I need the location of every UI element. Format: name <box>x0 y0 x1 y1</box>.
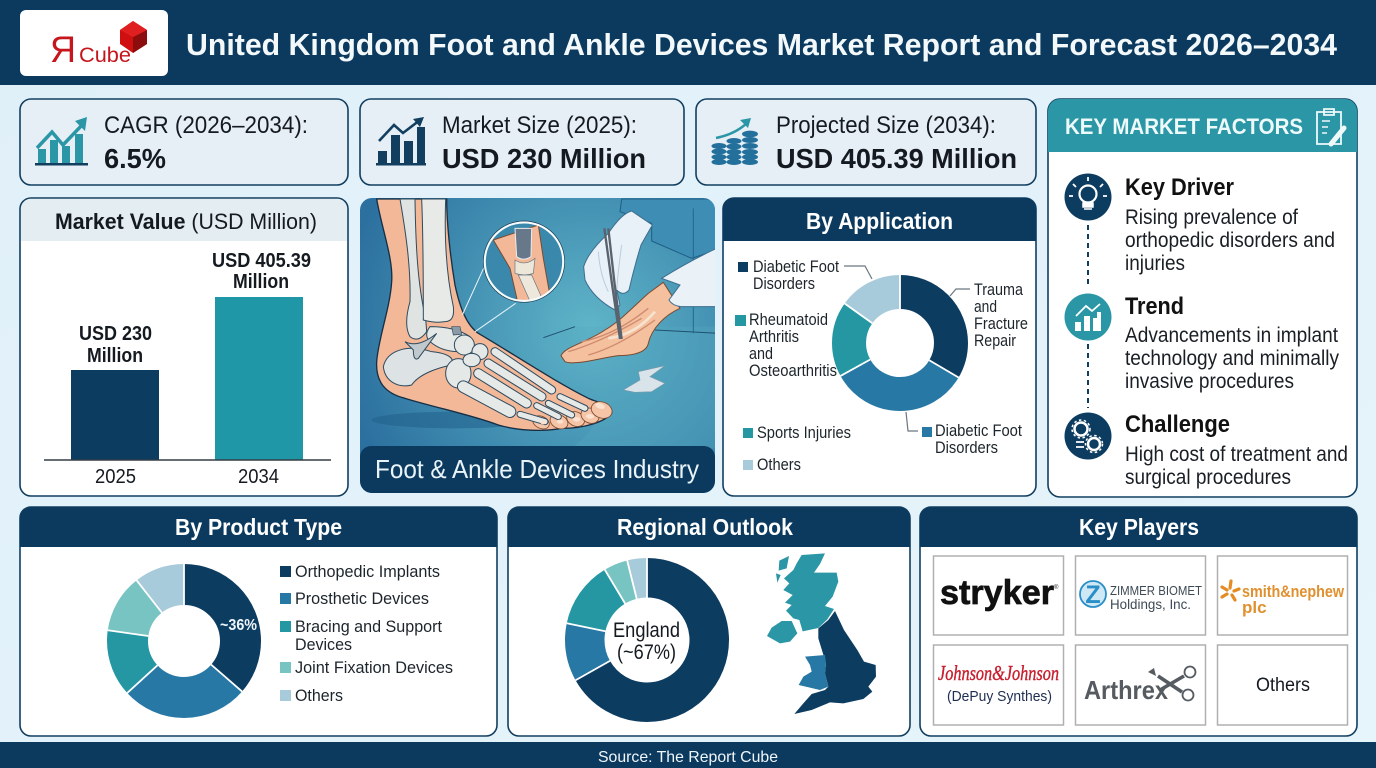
heading: regional outlook: Regional Outlook <box>617 514 793 540</box>
header band <box>0 0 1376 85</box>
bar: 2025: USD 230 <box>79 323 152 345</box>
caption: foot and ankle devices industry: Foot & Ankle Devices Industry <box>375 454 699 484</box>
logo card: stryker: stryker <box>940 574 1054 612</box>
logo card: others: Others <box>1256 674 1310 696</box>
logo: Cube <box>79 44 131 67</box>
heading: market value: Market Value (USD Million) <box>55 209 317 234</box>
leader lines <box>844 266 970 431</box>
sleeves <box>620 199 717 258</box>
KPI card: CAGR: CAGR (2026–2034): <box>104 112 308 139</box>
legend: product type: Prosthetic Devices <box>295 590 429 608</box>
KPI card: projected size: Projected Size (2034): <box>776 112 996 139</box>
logo card: smith and nephew: smith&nephew <box>1242 582 1345 601</box>
map: United Kingdom <box>767 553 876 714</box>
text: challenge: High cost of treatment and <box>1125 443 1348 466</box>
panel: foot and ankle illustration <box>360 198 720 493</box>
logo card: zimmer biomet <box>1076 556 1206 635</box>
bar: 2034 <box>212 250 311 488</box>
text: trend <box>1125 293 1339 393</box>
glove two <box>662 248 717 307</box>
heading: regional outlook <box>508 507 910 547</box>
logo card: arthrex <box>1076 645 1206 725</box>
legend: product type: Others <box>295 687 343 705</box>
legend: rheumatoid arthritis and osteoarthritis: Osteoarthritis <box>749 362 837 380</box>
panel: market value bar chart <box>20 198 348 496</box>
icon: trend chart <box>1064 294 1112 340</box>
KPI card: market size <box>360 99 684 185</box>
metatarsals outline <box>463 352 585 422</box>
bar: 2025: 2025 <box>95 466 136 488</box>
logo card: zimmer biomet: Holdings, Inc. <box>1110 596 1191 612</box>
panel: key market factors <box>1048 99 1357 497</box>
legend: diabetic foot disorders bottom <box>922 422 1022 457</box>
text: challenge <box>1125 411 1348 489</box>
legend: trauma and fracture repair: Fracture <box>974 315 1028 333</box>
text: trend: invasive procedures <box>1125 370 1294 393</box>
heading: key players: Key Players <box>1079 514 1199 540</box>
legend: diabetic foot disorders top <box>738 258 839 293</box>
legend: trauma and fracture repair: Trauma <box>974 281 1024 299</box>
logo card: johnson and johnson <box>934 645 1064 725</box>
KPI card: CAGR: 6.5% <box>104 143 166 174</box>
legend: product type: Orthopedic Implants <box>295 563 440 581</box>
text: key driver: Key Driver <box>1125 174 1234 201</box>
legend: diabetic foot disorders bottom: Diabetic Foot <box>935 422 1022 440</box>
legend: rheumatoid arthritis and osteoarthritis: Arthritis <box>749 328 799 346</box>
legend: rheumatoid arthritis and osteoarthritis <box>735 311 837 380</box>
KPI card: projected size: USD 405.39 Million <box>776 143 1017 174</box>
leg bones <box>400 199 427 339</box>
text: trend: technology and minimally <box>1125 347 1339 370</box>
metatarsals fill <box>463 352 585 422</box>
glove one <box>584 211 652 310</box>
KPI card: CAGR <box>20 99 348 185</box>
forceps <box>604 228 622 339</box>
heading: by application: By Application <box>806 208 953 234</box>
footer source bar: Source: The Report Cube <box>598 749 778 766</box>
logo card: stryker <box>934 556 1064 635</box>
legend: rheumatoid arthritis and osteoarthritis: Rheumatoid <box>749 311 828 329</box>
legend: product type: Bracing and Support <box>295 618 442 636</box>
text: key driver <box>1125 174 1335 275</box>
table surface <box>659 381 715 448</box>
legend: trauma and fracture repair: Repair <box>974 332 1016 350</box>
heading band: key market factors: KEY MARKET FACTORS <box>1065 114 1303 139</box>
title: United Kingdom Foot and Ankle Devices Market Report and Forecast 2026–2034 <box>186 27 1338 62</box>
icon: navy bar chart <box>376 117 426 166</box>
donut chart: regional: (~67%) <box>617 641 676 664</box>
gauze <box>623 366 665 392</box>
logo card: smith and nephew: plc <box>1242 598 1267 617</box>
heading: by product type <box>20 507 497 547</box>
toes <box>532 401 612 430</box>
legend: sports injuries: Sports Injuries <box>757 424 851 442</box>
caption: foot and ankle devices industry <box>360 446 715 493</box>
bar: 2034: Million <box>233 271 289 293</box>
logo card: stryker: ® <box>1054 584 1059 591</box>
text: key driver: orthopedic disorders and <box>1125 229 1335 252</box>
legend: others: Others <box>757 456 801 474</box>
logo card: johnson and johnson: (DePuy Synthes) <box>947 688 1052 705</box>
big foot <box>377 199 612 430</box>
legend: diabetic foot disorders top: Disorders <box>753 275 815 293</box>
legend: product type: Devices <box>295 636 352 654</box>
KPI card: market size: Market Size (2025): <box>442 112 637 139</box>
donut chart: application <box>841 275 959 394</box>
heading: by application <box>723 198 1036 241</box>
donut chart: product type: ~36% <box>220 617 257 634</box>
inset circle <box>483 221 565 305</box>
logo card: others <box>1218 645 1348 725</box>
text: key driver: Rising prevalence of <box>1125 206 1298 229</box>
panel: by application <box>723 198 1036 496</box>
logo: Я <box>50 29 76 70</box>
text: trend: Trend <box>1125 293 1184 320</box>
logo card: johnson and johnson: Johnson&Johnson <box>938 661 1059 685</box>
legend: trauma and fracture repair <box>974 281 1028 350</box>
logo card: zimmer biomet: ZIMMER BIOMET <box>1110 583 1202 598</box>
text: challenge: surgical procedures <box>1125 466 1291 489</box>
text: challenge: Challenge <box>1125 411 1230 438</box>
logo <box>20 10 168 76</box>
bar: 2034: USD 405.39 <box>212 250 311 272</box>
panel: regional outlook <box>508 507 910 736</box>
logo card: smith and nephew <box>1218 556 1348 635</box>
donut chart: regional <box>567 558 709 702</box>
text: trend: Advancements in implant <box>1125 324 1338 347</box>
connector dashes <box>1087 225 1089 408</box>
legend: rheumatoid arthritis and osteoarthritis: and <box>749 345 773 363</box>
footer source bar <box>0 742 1376 768</box>
bar: 2025: Million <box>87 345 143 367</box>
legend: product type: Joint Fixation Devices <box>295 659 453 677</box>
legend: trauma and fracture repair: and <box>974 298 997 316</box>
heading band: key market factors <box>1048 99 1357 152</box>
panel: by product type <box>20 507 497 736</box>
legend: product type <box>280 563 453 705</box>
legend: others <box>743 456 801 474</box>
heading: key players <box>920 507 1357 547</box>
donut chart: regional: England <box>613 619 680 642</box>
bar: 2034: 2034 <box>238 466 279 488</box>
donut chart: product type <box>108 564 257 698</box>
bar: 2025 <box>71 323 159 488</box>
legend: diabetic foot disorders top: Diabetic Foot <box>753 258 839 276</box>
icon: lightbulb <box>1064 174 1112 220</box>
heel and tarsal bones <box>383 348 452 386</box>
logo card: zimmer biomet: Z <box>1085 581 1101 609</box>
inset connector lines <box>462 267 516 332</box>
small foot <box>561 282 680 363</box>
icon: gears <box>1064 412 1112 460</box>
icon: coin stacks and arrow <box>712 118 758 165</box>
logo card: arthrex: Arthrex <box>1084 675 1168 705</box>
legend: diabetic foot disorders bottom: Disorders <box>935 439 998 457</box>
KPI card: projected size <box>696 99 1036 185</box>
nails <box>540 402 606 424</box>
panel: key players <box>920 507 1357 736</box>
heading: by product type: By Product Type <box>175 514 342 540</box>
heading: market value <box>21 199 347 241</box>
text: key driver: injuries <box>1125 252 1185 275</box>
KPI card: market size: USD 230 Million <box>442 143 646 174</box>
icon: teal growth chart <box>35 117 88 166</box>
